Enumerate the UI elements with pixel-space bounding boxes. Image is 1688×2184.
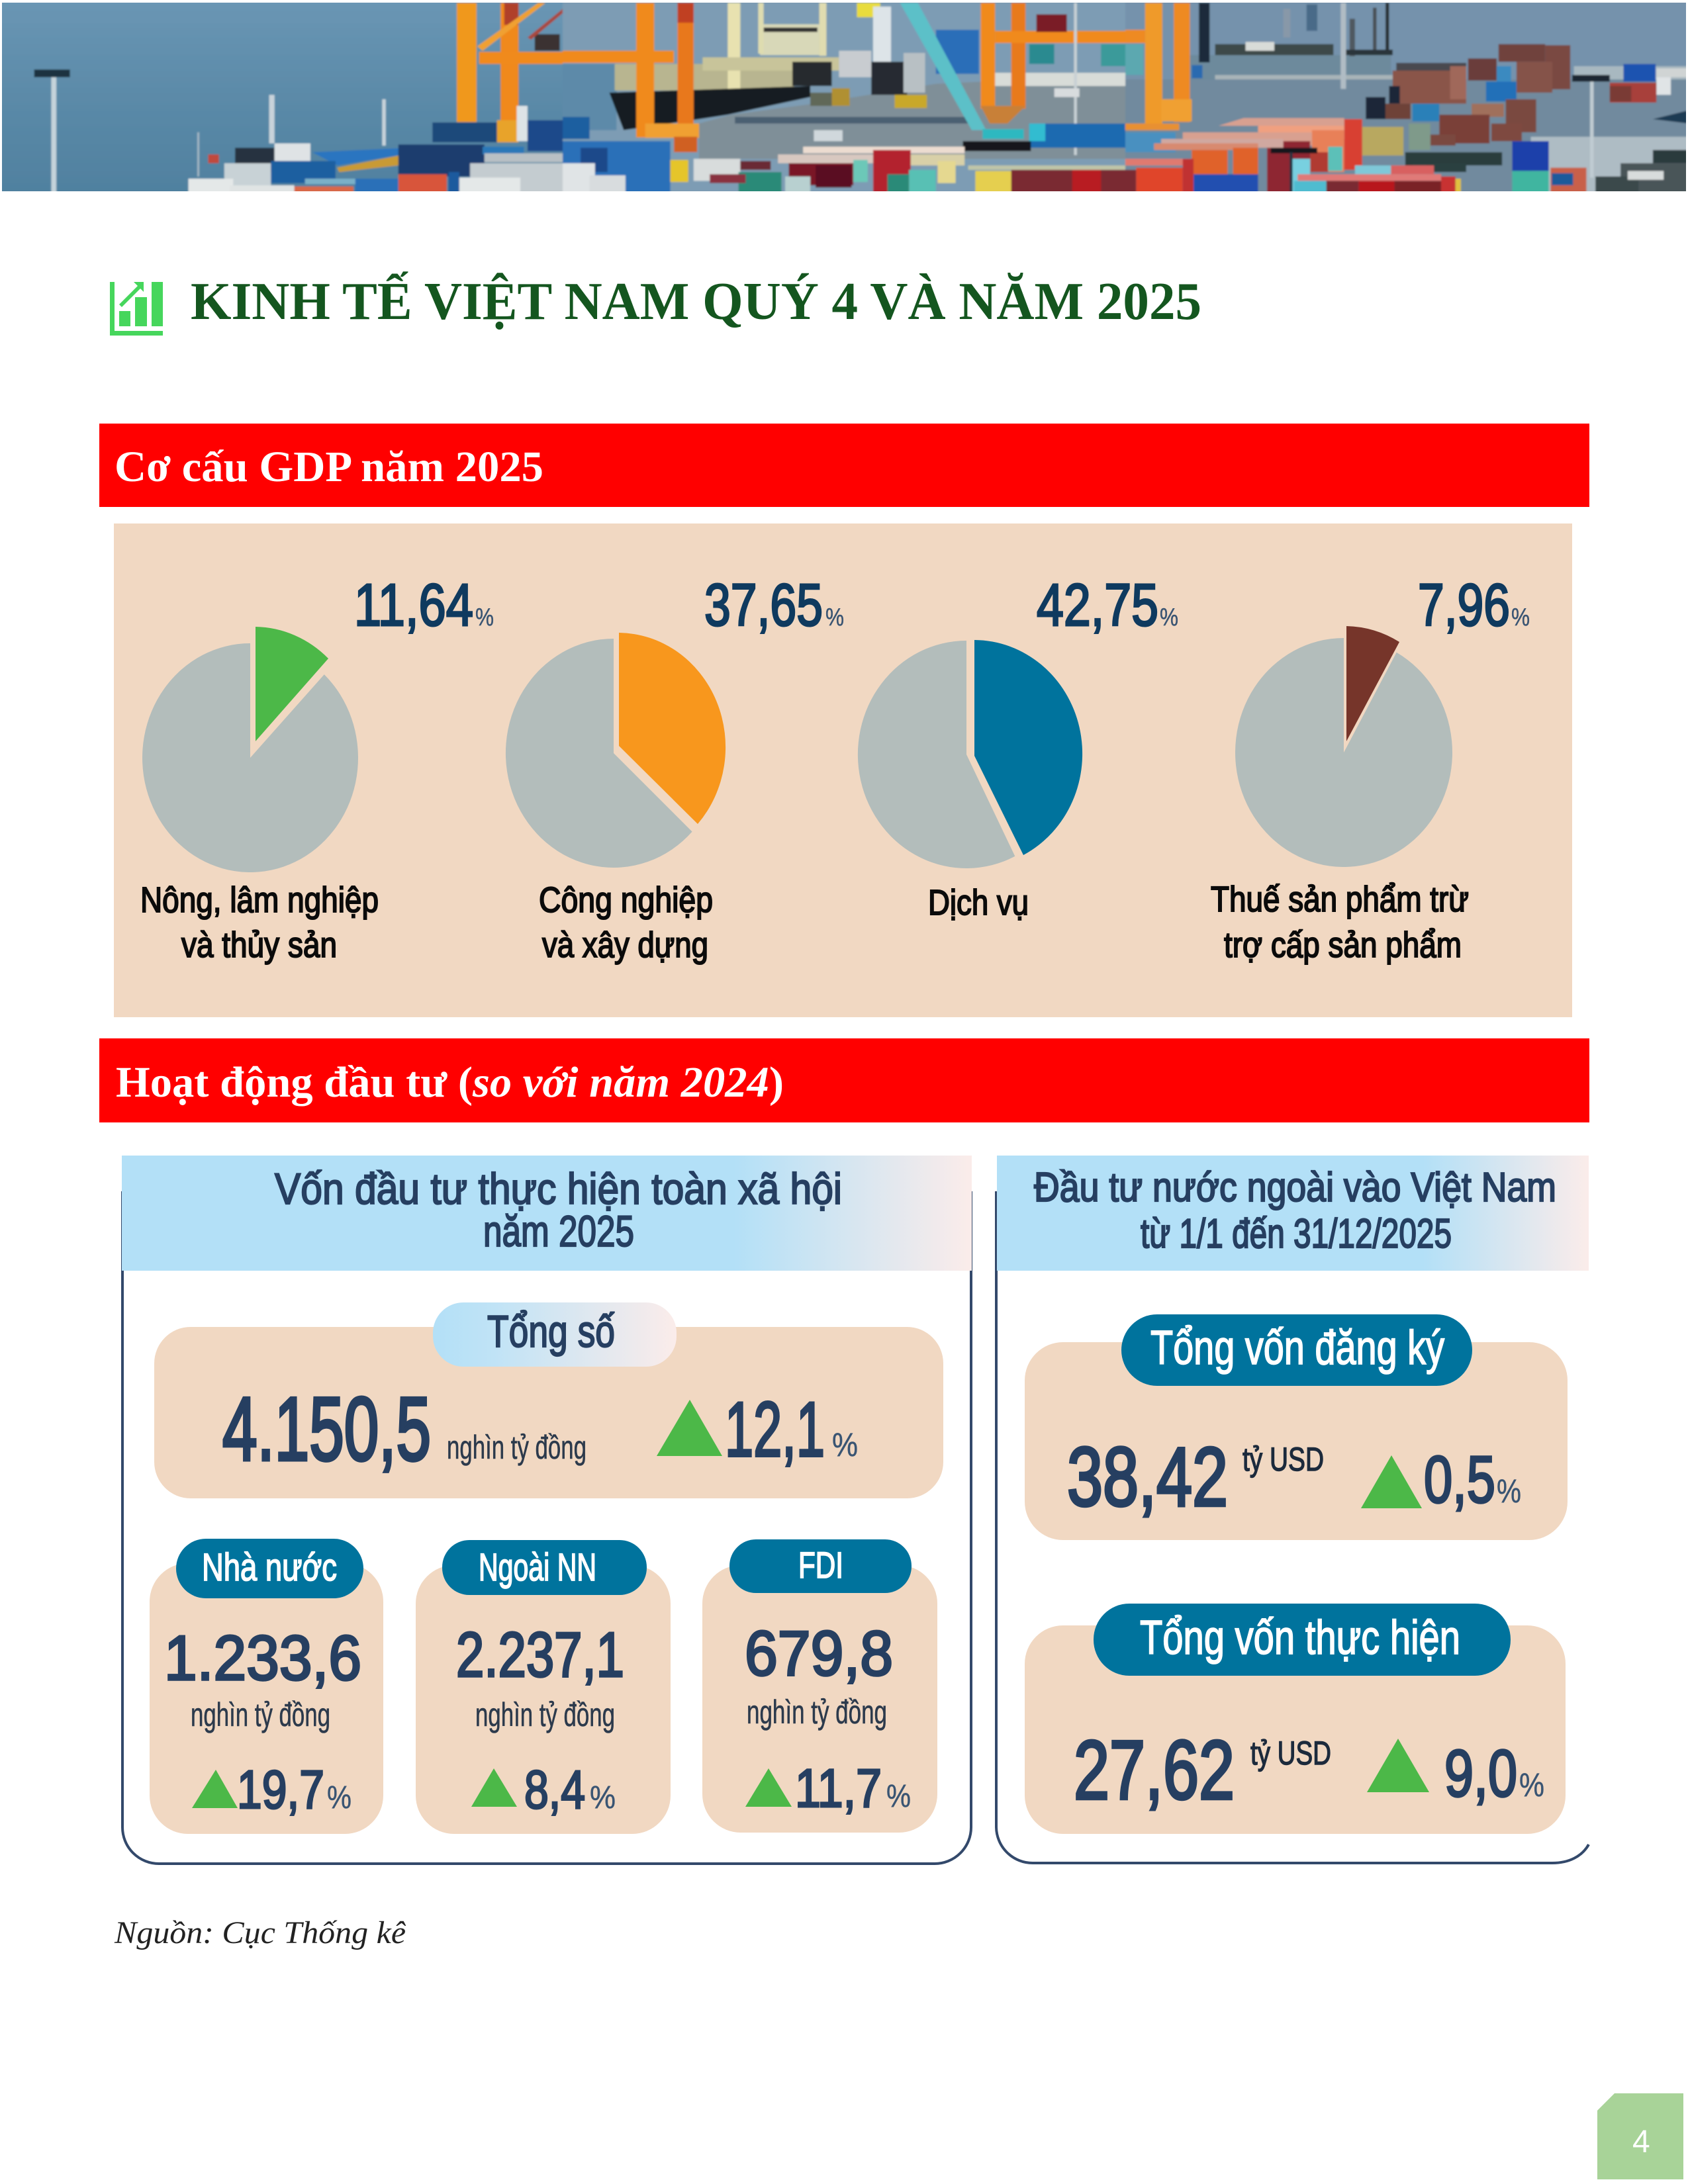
pie: agriculture 11.64%: và thủy sản [181,925,337,965]
card: state: % [327,1780,352,1815]
card: state: nghìn tỷ đồng [191,1696,330,1733]
header photo: container port [0,0,1688,197]
pie: services 42.75%: 42,75 [1037,572,1158,639]
photo right third [1125,0,1688,197]
card: disbursed capital: Tổng vốn thực hiện [1140,1612,1460,1664]
card: registered capital [1025,1314,1568,1540]
card: non-state: 8,4 [524,1760,585,1820]
card: non-state: Ngoài NN [479,1546,596,1589]
pie: services 42.75% [858,572,1178,923]
pie: agriculture 11.64%: Nông, lâm nghiệp [140,880,379,920]
pie: services 42.75%: Dịch vụ [928,883,1029,923]
card: total: 4.150,5 [222,1379,431,1479]
card: registered capital: % [1497,1473,1521,1510]
pie: product taxes 7.96% [1211,572,1530,965]
pie: product taxes 7.96%: Thuế sản phẩm trừ [1211,880,1469,919]
card: FDI: 679,8 [745,1618,893,1689]
title: KINH TẾ VIỆT NAM QUÝ 4 VÀ NĂM 2025 [191,271,1201,331]
page number tab: 4 [1632,2124,1650,2160]
card: state [150,1539,383,1834]
photo left third [0,0,563,197]
page number tab [1597,2093,1683,2179]
pie: industry 37.65%: Công nghiệp [539,880,713,920]
pie: agriculture 11.64%: % [475,604,494,631]
source note: Nguồn: Cục Thống kê [114,1915,406,1950]
card: registered capital: Tổng vốn đăng ký [1150,1322,1444,1375]
panel header: Đầu tư nước ngoài vào Việt Nam [1034,1165,1556,1210]
card: disbursed capital: 9,0 [1444,1737,1517,1811]
card: non-state: 2.237,1 [456,1619,624,1690]
card: total: 12,1 [725,1386,825,1473]
section bar: GDP structure: Cơ cấu GDP năm 2025 [115,443,543,491]
card: non-state [416,1540,671,1834]
card: non-state: % [590,1780,616,1815]
panel: GDP pie charts [114,523,1572,1017]
card: registered capital: 38,42 [1067,1430,1228,1524]
card: state: Nhà nước [202,1546,337,1589]
panel header: từ 1/1 đến 31/12/2025 [1141,1211,1452,1257]
panel: total social investment [122,1156,972,1864]
panel header: năm 2025 [483,1206,634,1255]
section bar: investment: Hoạt động đầu tư (so với năm 2024) [116,1058,784,1107]
section bar: investment [99,1038,1589,1122]
panel header [122,1156,972,1271]
pie: services 42.75%: % [1160,604,1178,631]
card: FDI: % [886,1779,911,1814]
pie: industry 37.65%: 37,65 [704,572,823,639]
icon: green bar chart with rising arrow [110,282,163,336]
pie: agriculture 11.64%: 11,64 [354,572,473,639]
section bar: GDP structure [99,424,1589,507]
card: disbursed capital: tỷ USD [1250,1735,1331,1772]
card: disbursed capital: % [1519,1766,1544,1803]
card: registered capital: 0,5 [1424,1443,1495,1517]
card: FDI: 11,7 [795,1758,882,1819]
card: registered capital: tỷ USD [1243,1441,1324,1478]
card: total [154,1302,943,1498]
pie: product taxes 7.96%: % [1511,604,1530,631]
card: disbursed capital [1025,1604,1566,1834]
panel: foreign investment [996,1156,1589,1863]
photo middle third [563,0,1126,197]
card: total: % [832,1426,858,1463]
pie: industry 37.65%: và xây dựng [542,925,708,965]
pie: industry 37.65%: % [825,604,844,631]
pie: industry 37.65% [506,572,844,965]
card: FDI [702,1539,937,1833]
card: state: 19,7 [237,1760,324,1820]
card: total: Tổng số [487,1306,615,1357]
card: disbursed capital: 27,62 [1074,1723,1235,1817]
pie: product taxes 7.96%: 7,96 [1418,572,1510,639]
panel header [997,1156,1589,1271]
pie: product taxes 7.96%: trợ cấp sản phẩm [1224,925,1462,965]
card: FDI: nghìn tỷ đồng [747,1694,887,1731]
card: FDI: FDI [798,1544,843,1586]
card: total: nghìn tỷ đồng [447,1429,586,1466]
pie: agriculture 11.64% [140,572,494,965]
card: state: 1.233,6 [164,1623,361,1694]
card: non-state: nghìn tỷ đồng [475,1696,615,1733]
panel header: Vốn đầu tư thực hiện toàn xã hội [275,1164,842,1213]
